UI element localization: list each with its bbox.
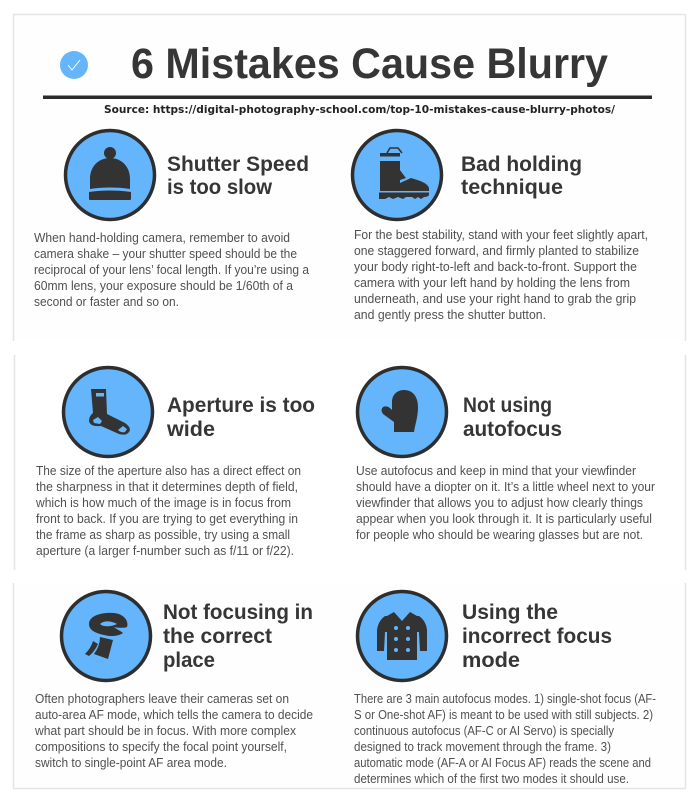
title: 6 Mistakes Cause Blurry: [131, 40, 608, 88]
text block: for people who should be wearing glasses but are not.: [356, 527, 643, 542]
heading: Aperture is too: [167, 393, 315, 417]
heading: [461, 152, 582, 199]
text block: the frame as sharp as possible, try using a small: [36, 527, 290, 542]
text block: designed to track movement through the frame. 3): [354, 739, 611, 754]
panel: aperture too wide: [35, 368, 315, 558]
icon: sock: [64, 368, 152, 456]
text block: [354, 227, 648, 322]
panel: using the incorrect focus mode: [354, 592, 656, 786]
text block: one staggered forward, and firmly planted to stabilize: [354, 243, 639, 258]
panel: bad holding technique: [352, 130, 648, 322]
panel: not focusing in the correct place: [34, 592, 313, 770]
text block: underneath, and use your right hand to grab the grip: [354, 291, 636, 306]
heading: Bad holding: [461, 152, 582, 176]
text block: aperture (a larger f-number such as f/11 or f/22).: [36, 543, 294, 558]
title rule: [43, 96, 652, 99]
text block: your body right-to-left and back-to-front. Support the: [354, 259, 637, 274]
icon: mitten: [358, 368, 446, 456]
heading: Not using: [463, 393, 552, 417]
heading: place: [163, 648, 215, 672]
text block: [34, 230, 310, 309]
icon: boot: [352, 130, 442, 220]
text block: determines which of the first two modes it should use.: [354, 771, 629, 786]
text block: The size of the aperture also has a direct effect on: [36, 463, 301, 478]
heading: Shutter Speed: [167, 152, 309, 176]
heading: autofocus: [463, 417, 562, 441]
text block: the sharpness in that it determines depth of field,: [36, 479, 298, 494]
text block: camera shake – your shutter speed should be the: [34, 246, 297, 261]
text block: what part should be in focus. With more complex: [34, 723, 296, 738]
text block: [34, 691, 313, 770]
text block: front to back. If you are trying to get everything in: [36, 511, 298, 526]
text block: compositions to specify the focal point yourself,: [35, 739, 287, 754]
text block: When hand-holding camera, remember to avoid: [34, 230, 290, 245]
text block: and gently press the shutter button.: [354, 307, 546, 322]
heading: mode: [462, 648, 520, 672]
text block: auto-area AF mode, which tells the camera to decide: [35, 707, 313, 722]
heading: technique: [461, 175, 563, 199]
heading: the correct: [163, 624, 272, 648]
heading: [463, 393, 562, 441]
text block: continuous autofocus (AF-C or AI Servo) is specially: [354, 723, 614, 738]
text block: second or faster and so on.: [34, 294, 179, 309]
source line: Source: https://digital-photography-school.com/top-10-mistakes-cause-blurry-photos/: [104, 104, 615, 116]
text block: 60mm lens, your exposure should be 1/60th of a: [34, 278, 294, 293]
text block: For the best stability, stand with your feet slightly apart,: [354, 227, 648, 242]
icon: coat: [358, 592, 446, 680]
text block: Often photographers leave their cameras set on: [35, 691, 289, 706]
text block: S or One-shot AF) is meant to be used with still subjects. 2): [354, 707, 653, 722]
heading: [167, 152, 309, 199]
heading: [166, 393, 315, 441]
icon: check badge: [60, 51, 88, 79]
icon: scarf: [62, 592, 150, 680]
heading: Not focusing in: [163, 600, 313, 624]
text block: Use autofocus and keep in mind that your viewfinder: [356, 463, 637, 478]
panel: not using autofocus: [356, 368, 656, 542]
icon: beanie: [66, 130, 154, 220]
text block: [35, 463, 301, 558]
text block: viewfinder that allows you to adjust how clearly things: [356, 495, 643, 510]
heading: [163, 600, 313, 672]
text block: camera with your left hand by holding the lens from: [354, 275, 630, 290]
text block: which is how much of the image is in focus from: [35, 495, 291, 510]
text block: reciprocal of your lens’ focal length. If you’re using a: [34, 262, 310, 277]
text block: [356, 463, 656, 542]
text block: There are 3 main autofocus modes. 1) single-shot focus (AF-: [354, 691, 656, 706]
heading: is too slow: [167, 175, 272, 199]
text block: automatic mode (AF-A or AI Focus AF) reads the scene and: [354, 755, 651, 770]
text block: should have a diopter on it. It’s a little wheel next to your: [356, 479, 656, 494]
text block: [354, 691, 656, 786]
heading: [462, 600, 612, 672]
text block: appear when you look through it. It is particularly useful: [356, 511, 652, 526]
panel: shutter speed: [34, 130, 310, 309]
heading: wide: [166, 417, 215, 441]
text block: switch to single-point AF area mode.: [35, 755, 227, 770]
heading: Using the: [462, 600, 558, 624]
heading: incorrect focus: [462, 624, 612, 648]
